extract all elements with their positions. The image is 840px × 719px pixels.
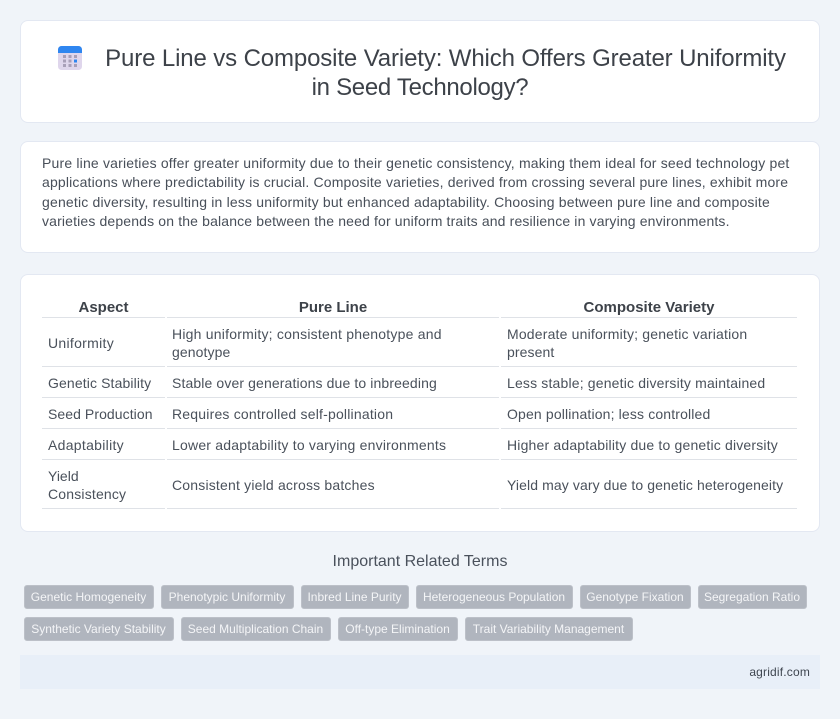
table header: Aspect [78,299,129,316]
summary text: Pure line varieties offer greater uniformity due to their genetic consistency, making them ideal for seed technology pet [42,155,790,171]
row: genetic stability: Genetic Stability [48,375,151,391]
related terms tags: Genotype Fixation [586,590,684,604]
row: seed production: Requires controlled self-pollination [172,406,393,422]
table header: Composite Variety [584,299,714,316]
row: seed production [42,406,797,429]
row: adaptability: Higher adaptability due to genetic diversity [507,437,778,453]
related terms tags: Genetic Homogeneity [31,590,146,604]
row: seed production: Seed Production [48,406,153,422]
footer source text: agridif.com [749,665,810,679]
related terms tags: Synthetic Variety Stability [31,622,166,636]
table header [42,299,797,318]
title panel [20,20,820,123]
summary text: genetic diversity, resulting in less uniformity but enhanced adaptability. Choosing between pure line and composite [42,194,770,210]
icon: calendar [58,46,82,70]
heading: in Seed Technology? [312,74,528,101]
related terms tags [24,585,807,641]
footer [20,655,820,689]
heading: Pure Line vs Composite Variety: Which Offers Greater Uniformity [105,45,786,72]
row: yield consistency: Consistent yield across batches [172,477,375,493]
row: genetic stability: Less stable; genetic diversity maintained [507,375,765,391]
row: genetic stability: Stable over generations due to inbreeding [172,375,437,391]
table header: Pure Line [299,299,367,316]
summary text [42,155,790,229]
related terms tags: Seed Multiplication Chain [188,622,323,636]
row: yield consistency: Yield may vary due to genetic heterogeneity [507,477,783,493]
summary text: varieties depends on the balance between the need for uniform traits and resilience in varying environments. [42,213,730,229]
row: adaptability [42,437,797,460]
row: uniformity [42,326,797,367]
related terms tags: Trait Variability Management [473,622,624,636]
row: uniformity: genotype [172,344,230,360]
related terms tags: Off-type Elimination [345,622,450,636]
row: yield consistency: Consistency [48,486,126,502]
related terms tags: Heterogeneous Population [423,590,565,604]
panel: comparison table [20,274,820,532]
row: yield consistency: Yield [48,468,79,484]
row: yield consistency [42,468,797,509]
summary text: applications where predictability is crucial. Composite varieties, derived from crossing several pure lines, exhibit more [42,174,788,190]
row: uniformity: High uniformity; consistent phenotype and [172,326,442,342]
row: genetic stability [42,375,797,398]
heading [105,45,786,101]
panel: summary [20,141,820,253]
related terms tags: Phenotypic Uniformity [169,590,285,604]
row: uniformity: present [507,344,554,360]
row: adaptability: Lower adaptability to varying environments [172,437,446,453]
row: seed production: Open pollination; less controlled [507,406,710,422]
row: uniformity: Moderate uniformity; genetic variation [507,326,747,342]
row: adaptability: Adaptability [48,437,124,453]
related terms tags: Segregation Ratio [704,590,800,604]
related terms tags: Inbred Line Purity [307,590,402,604]
related terms heading: Important Related Terms [333,553,507,570]
row: uniformity: Uniformity [48,335,114,351]
